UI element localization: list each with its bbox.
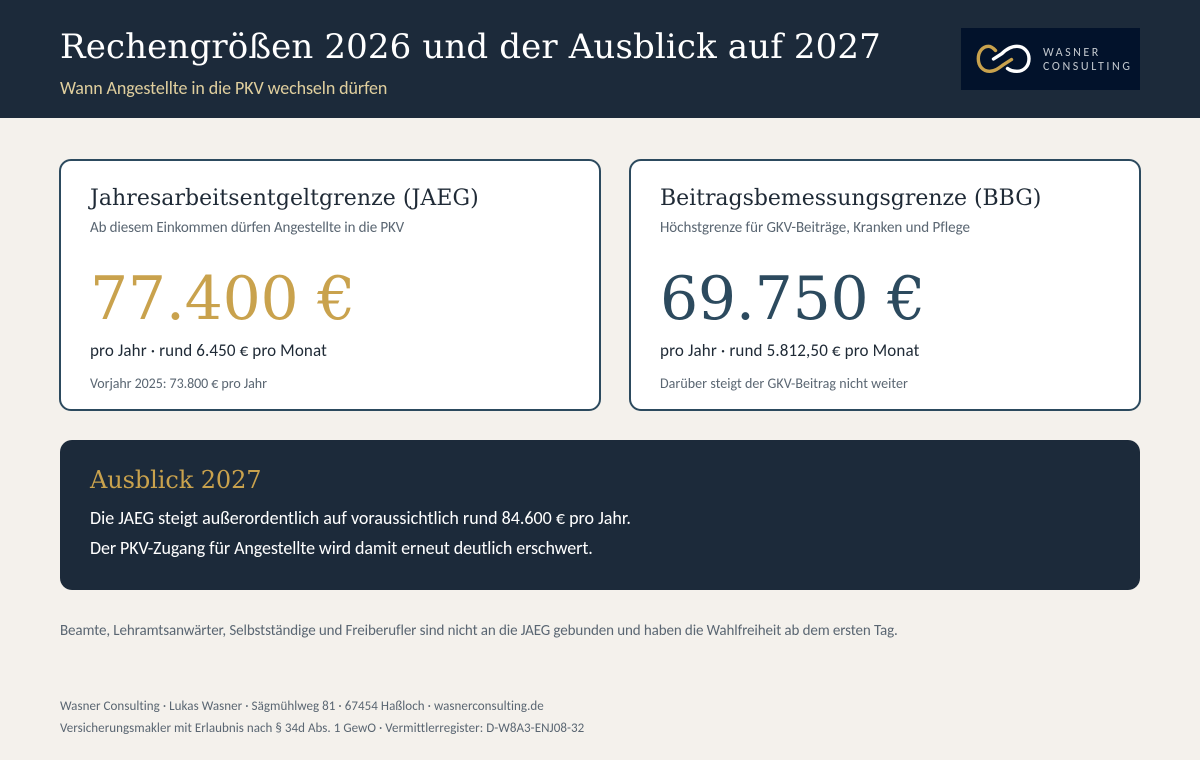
logo: [961, 28, 1140, 90]
outlook text line 1: Die JAEG steigt außerordentlich auf voraussichtlich rund 84.600 € pro Jahr.: [90, 507, 631, 529]
JAEG previous year: Vorjahr 2025: 73.800 € pro Jahr: [90, 375, 267, 392]
note on free choice: Beamte, Lehramtsanwärter, Selbstständige und Freiberufler sind nicht an die JAEG gebunden und haben die Wahlfreiheit ab dem ersten Tag.: [60, 622, 898, 640]
outlook heading: Ausblick 2027: [90, 466, 261, 494]
outlook text line 2: Der PKV-Zugang für Angestellte wird damit erneut deutlich erschwert.: [90, 537, 593, 559]
BBG value: 69.750 €: [660, 264, 925, 334]
JAEG per year and month: pro Jahr · rund 6.450 € pro Monat: [90, 340, 327, 361]
icon: interlocked loop mark: [976, 44, 1031, 73]
JAEG description: Ab diesem Einkommen dürfen Angestellte in die PKV: [90, 219, 404, 237]
BBG heading: Beitragsbemessungsgrenze (BBG): [660, 186, 1041, 211]
subtitle: Wann Angestellte in die PKV wechseln dürfen: [60, 77, 387, 99]
header band: [0, 0, 1200, 118]
title: Rechengrößen 2026 und der Ausblick auf 2027: [60, 27, 881, 67]
footer: [60, 699, 584, 736]
panel: BBG: [629, 159, 1141, 411]
BBG note: Darüber steigt der GKV-Beitrag nicht weiter: [660, 375, 908, 392]
JAEG heading: Jahresarbeitsentgeltgrenze (JAEG): [90, 186, 479, 211]
footer line 2: Versicherungsmakler mit Erlaubnis nach § 34d Abs. 1 GewO · Vermittlerregister: D-W8A3-ENJ08-32: [60, 721, 584, 736]
JAEG value: 77.400 €: [90, 264, 355, 334]
BBG per year and month: pro Jahr · rund 5.812,50 € pro Monat: [660, 340, 919, 361]
panel: JAEG: [59, 159, 601, 411]
logo text: WASNER: [1043, 46, 1101, 60]
footer line 1: Wasner Consulting · Lukas Wasner · Sägmühlweg 81 · 67454 Haßloch · wasnerconsulting.de: [60, 699, 544, 714]
panel: Ausblick 2027: [60, 440, 1140, 590]
BBG description: Höchstgrenze für GKV-Beiträge, Kranken und Pflege: [660, 219, 970, 237]
logo: CONSULTING: [1043, 60, 1133, 74]
